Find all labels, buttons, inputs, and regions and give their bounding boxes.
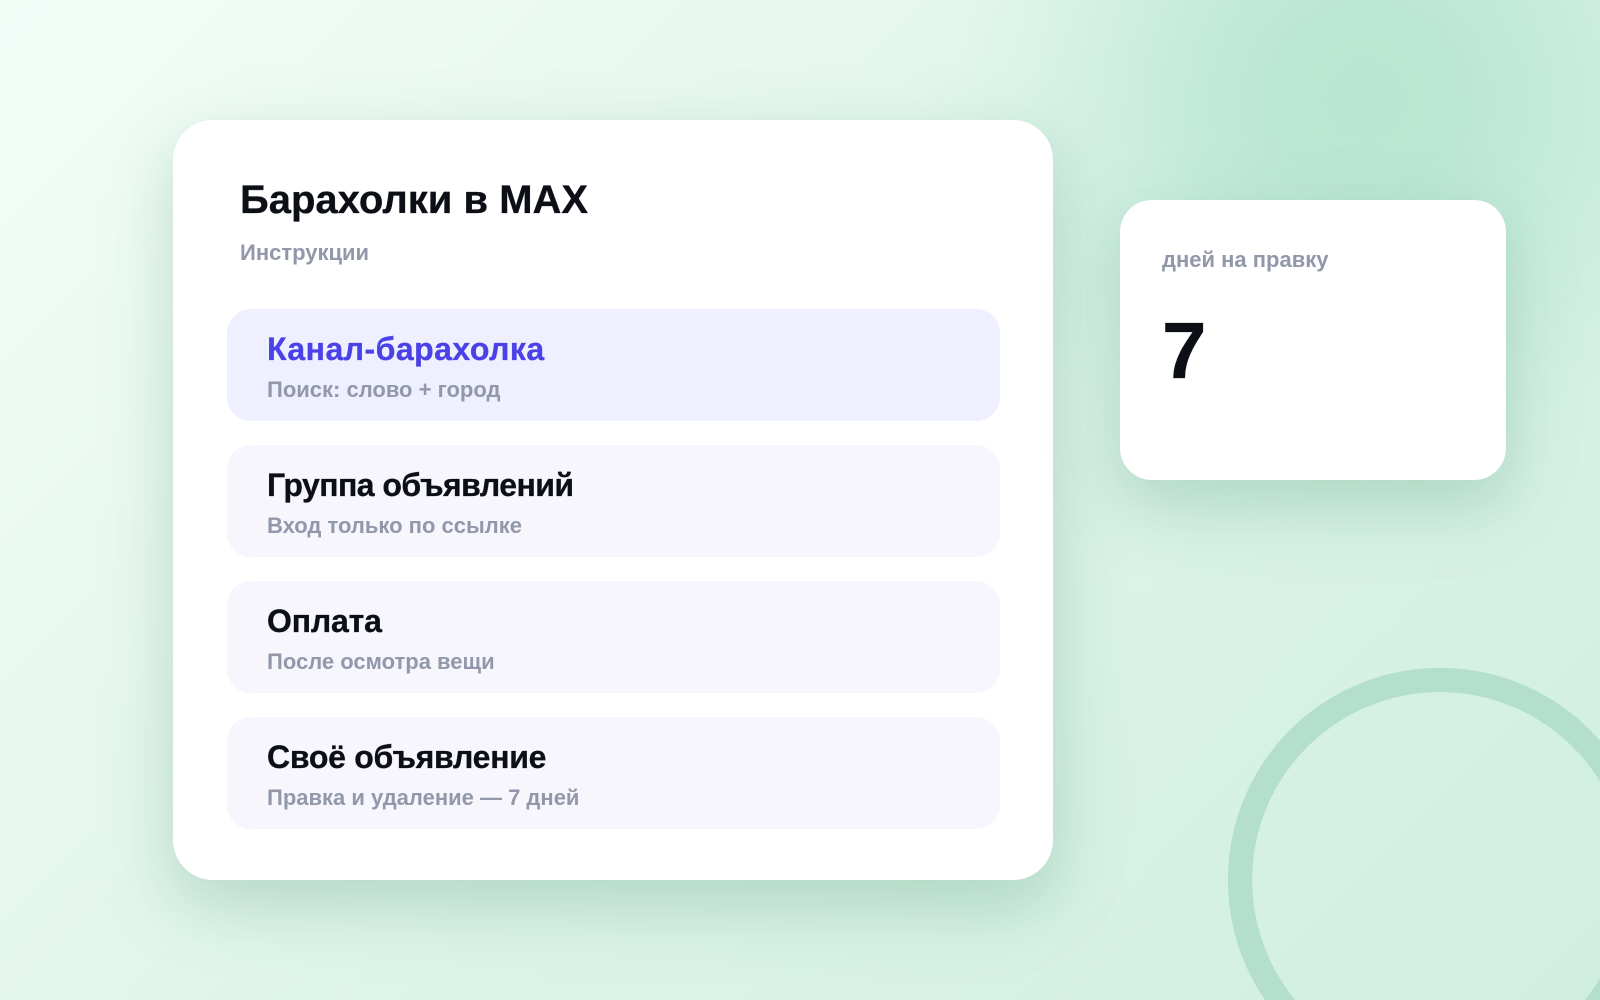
decorative ring [1228, 668, 1600, 1000]
item: group [227, 445, 1000, 557]
item: channel [227, 309, 1000, 421]
item title: Своё объявление [267, 739, 546, 775]
subtitle: Инструкции [240, 240, 369, 265]
stat label: дней на правку [1162, 247, 1328, 272]
stat value: 7 [1162, 306, 1206, 395]
item description: После осмотра вещи [267, 649, 495, 674]
item description: Правка и удаление — 7 дней [267, 785, 579, 810]
panel: stat card [1120, 200, 1506, 480]
title: Барахолки в MAX [240, 178, 588, 222]
item description: Вход только по ссылке [267, 513, 522, 538]
item: payment [227, 581, 1000, 693]
panel: instructions card [173, 120, 1053, 880]
item title: Оплата [267, 603, 382, 639]
item description: Поиск: слово + город [267, 377, 500, 402]
item title: Канал-барахолка [267, 331, 545, 367]
item title: Группа объявлений [267, 467, 574, 503]
item: own listing [227, 717, 1000, 829]
